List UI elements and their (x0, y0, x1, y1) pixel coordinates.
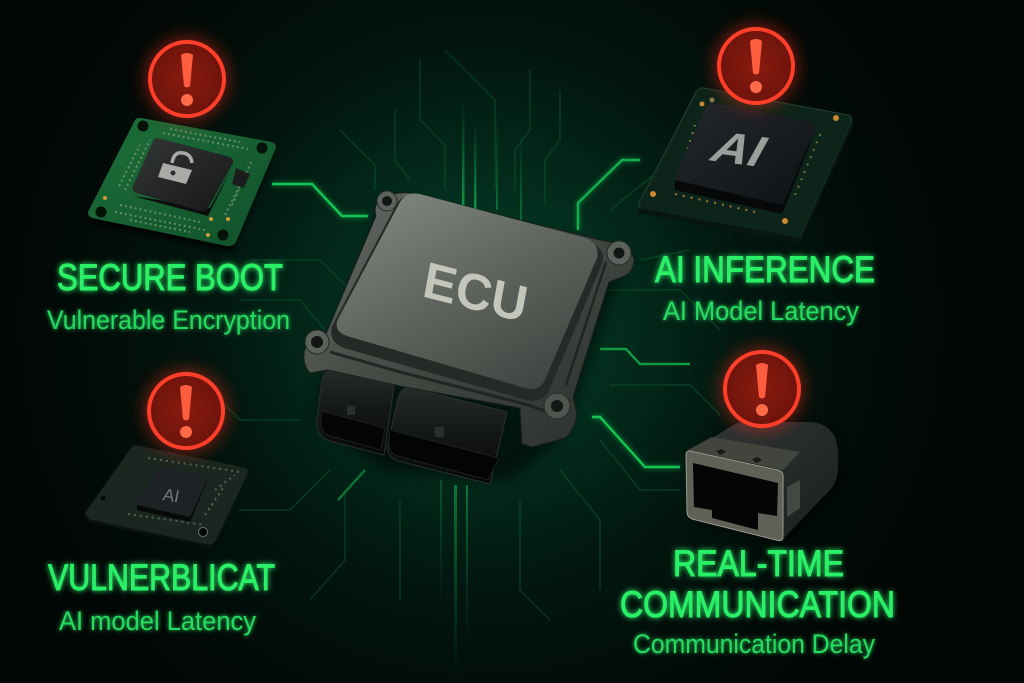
text: secure boot (47, 257, 290, 335)
component: vulnerable AI board (85, 445, 248, 548)
alert: secure boot (147, 39, 227, 119)
screw: bottom left (305, 330, 329, 354)
trace: secure boot (272, 184, 368, 216)
trace: AI inference (578, 160, 640, 230)
subtitle: Vulnerable Encryption (47, 305, 290, 335)
chip label: AI (161, 484, 181, 506)
connector tabs (716, 449, 726, 455)
ECU module (304, 191, 634, 484)
ECU base plate (304, 193, 634, 447)
screw: bottom right (544, 393, 570, 419)
vertical traces top (462, 100, 522, 220)
AI chip label: AI (702, 124, 777, 176)
AI board (638, 88, 854, 243)
dim circuit traces (210, 50, 720, 620)
screw: top left (377, 191, 397, 211)
heading: VULNERBLICAT (48, 557, 275, 598)
heading: SECURE BOOT (57, 257, 283, 298)
alert: vulnerable AI (146, 371, 226, 451)
connector top (688, 437, 800, 470)
connector front frame (686, 451, 783, 541)
subtitle: AI model Latency (59, 606, 256, 636)
heading line 1: REAL-TIME (673, 543, 844, 584)
component: network connector (686, 422, 845, 545)
bright circuit traces (272, 160, 690, 467)
heading line 2: COMMUNICATION (620, 584, 895, 625)
text: AI inference (655, 249, 875, 326)
component: AI inference (638, 88, 854, 243)
vertical traces bottom (338, 470, 468, 683)
alert: AI inference (716, 26, 796, 106)
trace: real-time lower (592, 417, 680, 467)
ECU label: ECU (419, 250, 532, 333)
alert: real-time (722, 349, 802, 429)
ECU lower rim line (330, 352, 548, 412)
text: real-time communication (620, 543, 895, 659)
connector side notch (787, 480, 800, 517)
connector rear body (712, 422, 838, 538)
component: secure boot (88, 118, 276, 253)
ECU shadow (315, 200, 625, 480)
subtitle: Communication Delay (633, 629, 875, 659)
heading: AI INFERENCE (655, 249, 875, 290)
connector: right (387, 388, 507, 484)
small chip (232, 168, 250, 188)
connector: left (317, 370, 394, 455)
connector shadow (690, 430, 845, 545)
secure chip (132, 138, 236, 216)
text: vulnerable AI (48, 557, 275, 636)
AI chip (675, 103, 817, 214)
subtitle: AI Model Latency (663, 296, 859, 326)
icon: open padlock (158, 153, 192, 184)
circuit board (88, 118, 276, 253)
ECU side rim line (566, 262, 606, 385)
AI chip small (137, 467, 208, 522)
ECU lid (337, 193, 598, 389)
ECU lid edge (331, 196, 603, 401)
connector opening (693, 463, 778, 530)
trace: real-time top (600, 349, 690, 364)
dark board (85, 445, 248, 548)
screw: top right (607, 241, 631, 265)
